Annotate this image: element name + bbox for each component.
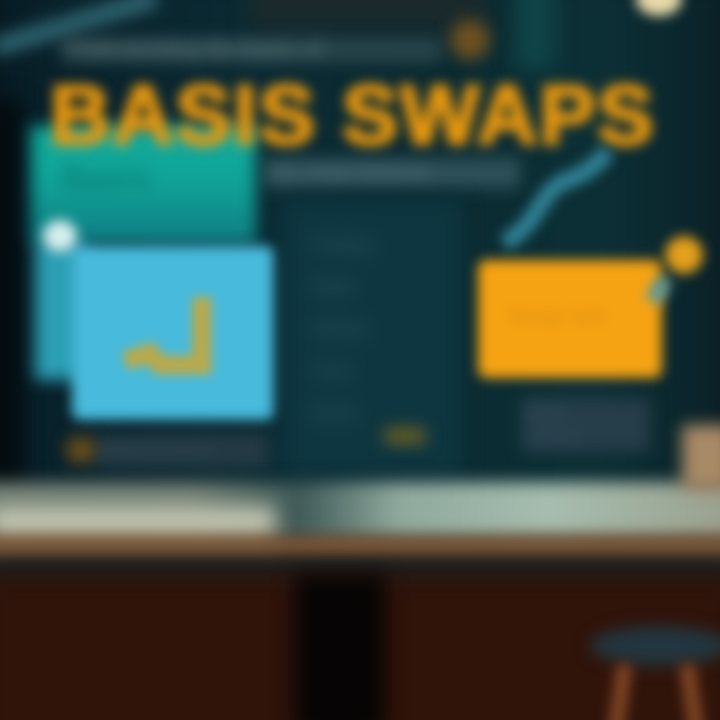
right box on table	[682, 425, 720, 490]
background: dark wall	[0, 0, 720, 500]
orange card text: Swap rate	[508, 303, 607, 328]
stool seat	[590, 626, 720, 666]
subheading text	[265, 158, 520, 188]
center list rows: Tenor	[312, 361, 355, 380]
caption under orange card	[522, 398, 650, 452]
top wall panels	[250, 0, 490, 30]
dark table leg	[295, 575, 385, 720]
arrow: teal curve	[496, 141, 619, 254]
icon: orange dot	[665, 236, 703, 274]
left dark edge	[0, 100, 22, 490]
panel: orange card	[478, 260, 662, 378]
teal header text: Basis	[61, 159, 152, 197]
right teal stripe	[515, 0, 555, 70]
caption under blue card: Notional amount	[95, 442, 212, 459]
table light left	[0, 506, 275, 540]
top-left light streak	[0, 0, 159, 56]
title: BASIS SWAPS	[50, 68, 655, 162]
center list rows: Reset	[312, 403, 356, 422]
center list rows	[312, 224, 437, 444]
icon: yellow chart line	[116, 290, 220, 382]
panel: blue card body	[72, 246, 275, 420]
subheading text: Key swap features	[265, 162, 430, 184]
center list rows: Floating	[312, 235, 372, 254]
center list rows: Rates	[312, 277, 356, 296]
orange dot icon	[450, 20, 490, 60]
subtitle above title	[62, 38, 442, 62]
center list rows: Spread	[312, 319, 367, 338]
subtitle above title: Understanding the basics of	[62, 38, 322, 61]
table top back band	[0, 482, 720, 540]
panel: blue card left strip	[35, 240, 85, 380]
stool leg right	[679, 663, 705, 720]
caption under orange card: Market	[522, 402, 568, 419]
stool leg left	[607, 663, 633, 720]
panel: teal header	[31, 126, 256, 244]
table edge	[0, 536, 720, 556]
table front shade	[0, 566, 720, 720]
panel: center list	[282, 200, 462, 475]
center list gold accent	[385, 428, 425, 444]
connector: orange dot to card	[645, 275, 673, 305]
top right lamp glow	[636, 0, 682, 16]
caption under blue card	[95, 434, 270, 468]
caption under orange card: outcome	[522, 428, 580, 445]
icon: white spark	[43, 220, 77, 252]
icon: bottom left marker	[66, 436, 96, 464]
